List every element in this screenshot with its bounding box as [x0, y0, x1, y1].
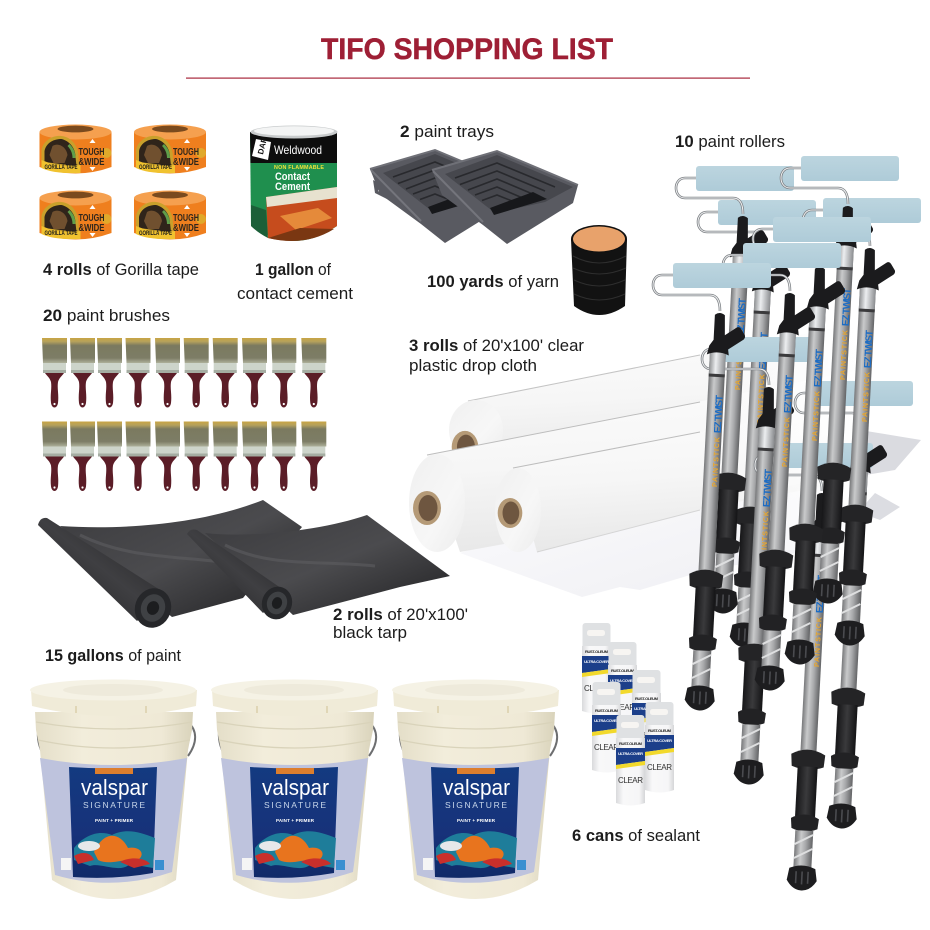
- tape roll 4: GORILLA TAPE: [139, 231, 172, 237]
- icon: contact cement can: NON FLAMMABLE: [274, 165, 324, 171]
- label: contact cement line 2: contact cement: [237, 285, 353, 303]
- item: contact cement: [250, 126, 338, 279]
- icon: paint roller 9: EZ TWIST: [855, 513, 868, 551]
- icon: paint roller 5: PAINTSTICK: [812, 391, 821, 441]
- icon: paint roller 6: PAINTSTICK: [782, 417, 791, 467]
- icon: sealant can 6: CLEAR: [618, 776, 643, 785]
- label: contact cement: 1 gallon of: [255, 261, 331, 279]
- icon: sealant can 5: ULTRA COVER: [647, 738, 672, 743]
- icon: paint roller 7: PAINTSTICK: [712, 437, 721, 487]
- icon: sealant can 4: ULTRA COVER: [594, 718, 619, 723]
- icon: paint bucket 1: SIGNATURE: [83, 800, 145, 810]
- label: yarn: 100 yards of yarn: [427, 273, 559, 291]
- icon: paint tray front: [432, 151, 578, 244]
- label: Gorilla tape: 4 rolls of Gorilla tape: [43, 261, 199, 279]
- icon: sealant can 4: RUST-OLEUM: [595, 708, 619, 713]
- icon: tarp roll 1: [38, 500, 302, 633]
- icon: sealant can 3: CLEAR: [634, 731, 659, 740]
- tape roll 4: [134, 190, 206, 240]
- tape roll 1: TOUGH: [78, 146, 104, 158]
- icon: sealant can 2: RUST-OLEUM: [611, 668, 635, 673]
- item: paint buckets: [30, 647, 559, 899]
- tape roll 2: TOUGH: [173, 146, 199, 158]
- label: paint: 15 gallons of paint: [45, 647, 181, 665]
- icon: paint bucket 2: [211, 680, 378, 899]
- icon: sealant can 6: ULTRA COVER: [618, 751, 643, 756]
- icon: contact cement can: Contact: [275, 171, 310, 183]
- label: plastic line 1: 3 rolls of 20'x100' clear: [409, 337, 585, 355]
- tape roll 2: [134, 124, 206, 174]
- icon: sealant can 5: CLEAR: [647, 763, 672, 772]
- icon: paint roller 1: PAINTSTICK: [735, 340, 744, 390]
- brushes row 1: [42, 338, 326, 408]
- label: plastic line 2: plastic drop cloth: [409, 357, 537, 375]
- tape roll 1: GORILLA TAPE: [44, 165, 78, 171]
- icon: contact cement can: [250, 126, 338, 241]
- plastic roll middle: [409, 370, 860, 552]
- icon: paint bucket 2: valspar: [262, 775, 329, 800]
- icon: sealant can 2: [608, 642, 637, 732]
- tape roll 3: TOUGH: [78, 212, 104, 224]
- label: sealant: 6 cans of sealant: [572, 827, 700, 845]
- item: clear plastic drop cloth: [409, 310, 921, 597]
- label: paint rollers: 10 paint rollers: [675, 133, 785, 151]
- icon: paint bucket 1: valspar: [81, 775, 148, 800]
- item: paint trays: [370, 123, 578, 244]
- icon: sealant can 2: ULTRA COVER: [610, 678, 635, 683]
- tape roll 3: GORILLA TAPE: [44, 231, 78, 237]
- icon: paint roller 4: [803, 198, 921, 647]
- tape roll 1: [40, 124, 112, 174]
- icon: sealant can 1: ULTRA COVER: [584, 659, 609, 664]
- plastic sheet: [460, 430, 921, 597]
- icon: paint roller 5: EZ TWIST: [813, 349, 826, 387]
- icon: paint roller 7: EZ TWIST: [713, 395, 726, 433]
- item: yarn: [427, 225, 627, 315]
- icon: paint roller 10: PAINTSTICK: [814, 617, 823, 667]
- label: paint brushes: 20 paint brushes: [43, 307, 170, 325]
- icon: paint roller 4: PAINTSTICK: [862, 372, 871, 422]
- icon: contact cement can: Weldwood: [274, 143, 322, 157]
- item: paint brushes: [42, 307, 326, 491]
- icon: sealant can 5: RUST-OLEUM: [648, 728, 672, 733]
- icon: paint roller 4: EZ TWIST: [863, 330, 876, 368]
- icon: sealant can 4: [592, 682, 621, 772]
- icon: paint roller 3: PAINTSTICK: [757, 374, 766, 424]
- icon: paint roller 10: EZ TWIST: [815, 575, 828, 613]
- tape roll 3: &WIDE: [78, 222, 104, 234]
- icon: tarp roll 2: [187, 515, 450, 624]
- title: TIFO SHOPPING LIST: [321, 33, 613, 66]
- icon: sealant can 3: RUST-OLEUM: [635, 696, 659, 701]
- icon: sealant can 2: CLEAR: [610, 703, 635, 712]
- icon: paint bucket 3: [392, 680, 559, 899]
- plastic roll back: [449, 323, 860, 470]
- icon: sealant can 1: [582, 623, 611, 714]
- icon: paint roller 9: [795, 381, 913, 830]
- icon: paint roller 8: [702, 337, 820, 786]
- icon: paint roller 1: EZ TWIST: [736, 298, 749, 336]
- tape roll 2: &WIDE: [173, 156, 199, 168]
- icon: contact cement can: Cement: [275, 181, 310, 193]
- icon: paint bucket 3: PAINT + PRIMER: [457, 818, 496, 823]
- icon: paint roller 3: EZ TWIST: [758, 332, 771, 370]
- tape roll 4: &WIDE: [173, 222, 199, 234]
- icon: paint bucket 3: valspar: [443, 775, 510, 800]
- icon: sealant can 6: RUST-OLEUM: [619, 741, 643, 746]
- icon: paint bucket 1: PAINT + PRIMER: [95, 818, 134, 823]
- label: tarp line 1: 2 rolls of 20'x100': [333, 606, 468, 624]
- icon: paint bucket 1: [30, 680, 197, 899]
- brushes row 2: [42, 422, 326, 491]
- icon: sealant can 1: CLEAR: [584, 684, 609, 693]
- icon: paint roller 3: [698, 200, 816, 649]
- plastic roll front: [495, 401, 860, 552]
- item: Gorilla tape: [40, 124, 206, 279]
- icon: paint roller 9: PAINTSTICK: [854, 555, 863, 605]
- icon: sealant can 3: [632, 670, 661, 760]
- icon: contact cement can: DAP: [256, 136, 269, 155]
- icon: paint roller 8: EZ TWIST: [762, 469, 775, 507]
- icon: paint roller 2: [781, 156, 899, 605]
- icon: paint roller 8: PAINTSTICK: [761, 511, 770, 561]
- tape roll 4: TOUGH: [173, 212, 199, 224]
- item: paint rollers: [653, 133, 921, 892]
- icon: sealant can 5: [645, 702, 674, 792]
- icon: paint roller 2: EZ TWIST: [841, 288, 854, 326]
- label: paint trays: 2 paint trays: [400, 123, 494, 141]
- icon: paint bucket 2: PAINT + PRIMER: [276, 818, 315, 823]
- icon: paint roller 2: PAINTSTICK: [840, 330, 849, 380]
- icon: sealant can 6: [616, 715, 645, 806]
- icon: paint roller 1: [676, 166, 794, 615]
- item: sealant cans: [572, 623, 700, 845]
- tape roll 2: GORILLA TAPE: [139, 165, 172, 171]
- icon: paint roller 10: [755, 443, 873, 892]
- label: tarp line 2: black tarp: [333, 624, 407, 642]
- icon: paint bucket 3: SIGNATURE: [445, 800, 507, 810]
- icon: paint roller 6: EZ TWIST: [783, 375, 796, 413]
- icon: paint tray back: [370, 150, 516, 243]
- icon: paint bucket 2: SIGNATURE: [264, 800, 326, 810]
- tape roll 1: &WIDE: [78, 156, 104, 168]
- icon: sealant can 1: RUST-OLEUM: [585, 649, 609, 654]
- icon: paint roller 5: [753, 217, 871, 666]
- icon: yarn spool: [571, 225, 627, 315]
- icon: sealant can 3: ULTRA COVER: [634, 706, 659, 711]
- icon: sealant can 4: CLEAR: [594, 743, 619, 752]
- tape roll 3: [40, 190, 112, 240]
- item: black tarp: [38, 500, 468, 642]
- icon: paint roller 7: [653, 263, 771, 712]
- icon: paint roller 6: [723, 243, 841, 692]
